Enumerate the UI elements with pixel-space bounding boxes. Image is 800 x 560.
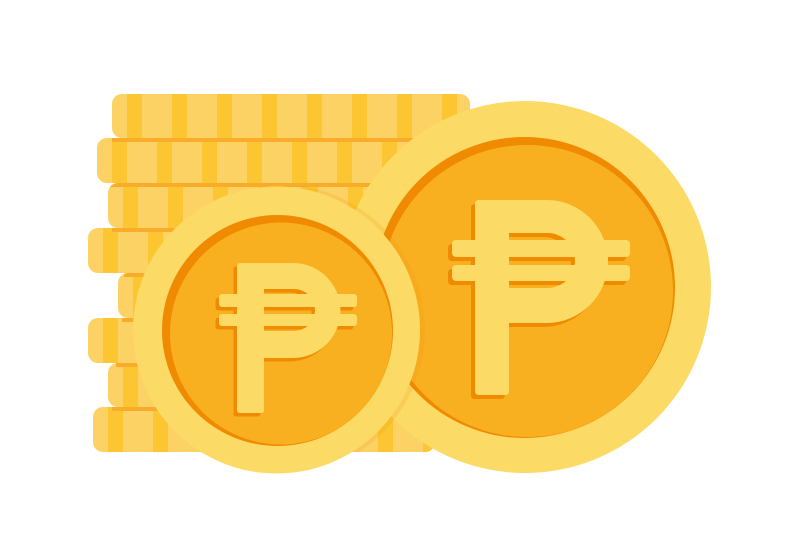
stack coin 2 [97,138,442,183]
stack coin 1 [112,94,470,138]
small coin rim [133,186,420,474]
large peso coin [339,101,711,473]
stack coin 7 [108,363,156,407]
icon: large peso sign [452,200,630,395]
stack coin 6 [88,318,137,363]
stack coin 8 [93,407,438,452]
stack coin 5 [118,273,145,318]
icon: large peso sign shadow [448,204,626,399]
small coin cast shadow [300,187,412,452]
coin stack [88,94,470,452]
small peso coin [133,186,420,474]
illustration: peso coins [88,94,711,474]
large coin face [374,137,675,438]
small coin face [162,215,393,446]
icon: small peso sign shadow [216,266,354,416]
stack coin 4 [88,228,176,273]
icon: small peso sign [219,263,357,413]
large coin rim [339,101,711,473]
stack coin 3 [108,183,371,228]
